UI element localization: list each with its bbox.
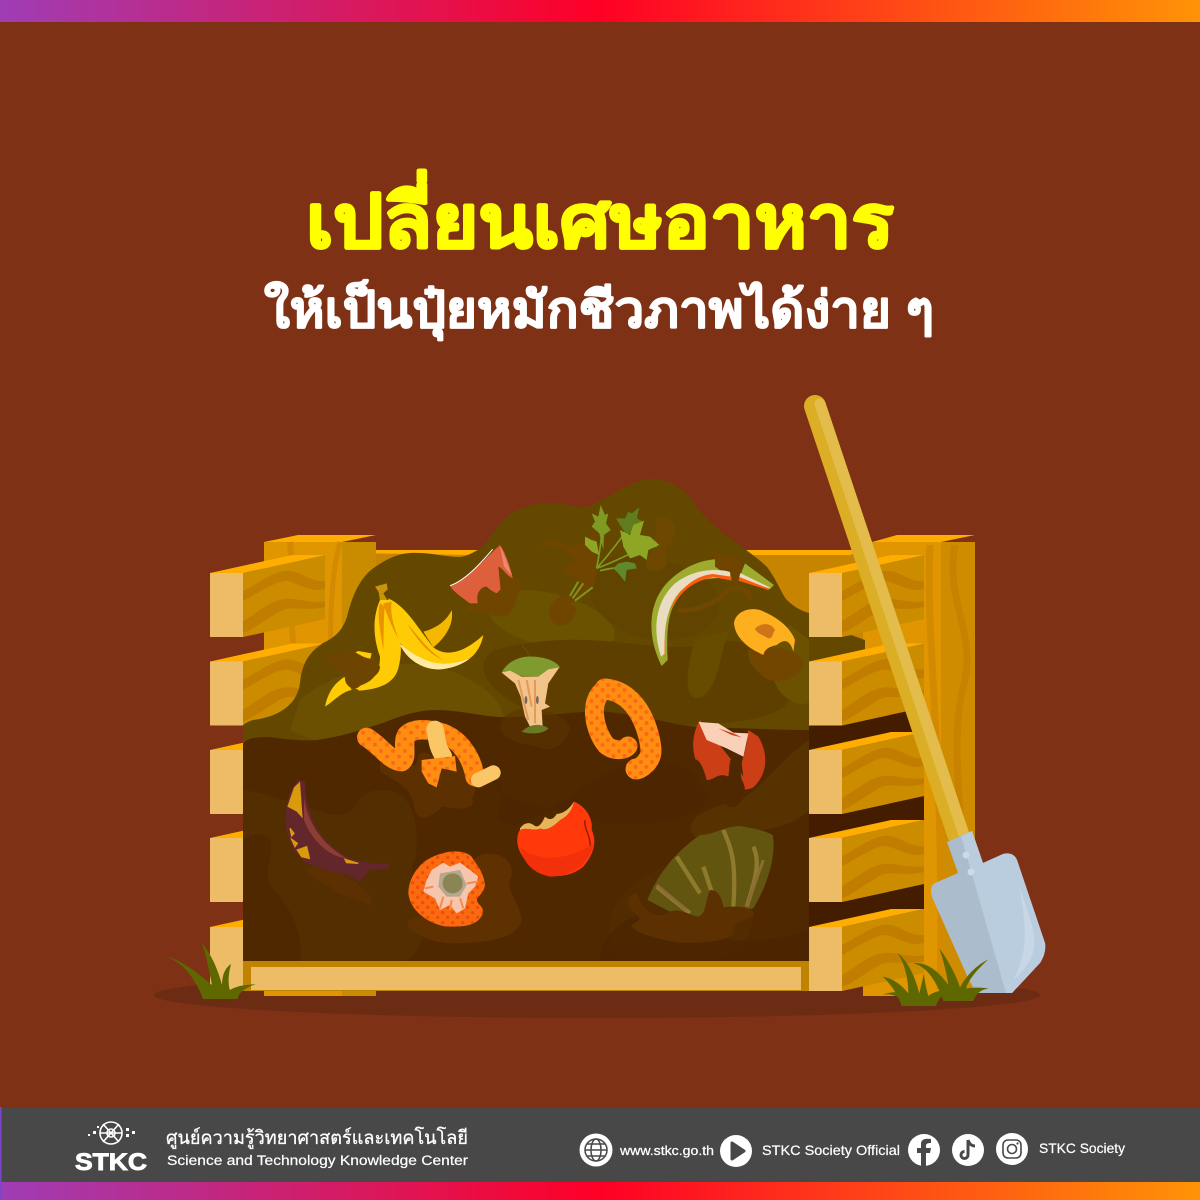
food: half-eaten mandarin xyxy=(408,851,522,943)
left planks xyxy=(210,555,325,991)
food: rotten cabbage xyxy=(628,826,774,943)
icon: instagram xyxy=(996,1133,1028,1165)
food: carrot tops xyxy=(533,505,675,625)
bin bottom frame xyxy=(243,961,809,991)
icon: globe xyxy=(580,1134,612,1166)
food: orange peel ring xyxy=(594,689,651,769)
logo wordmark: STKC xyxy=(75,1149,147,1176)
pile mid blobs xyxy=(290,664,503,754)
icon: facebook xyxy=(908,1134,940,1166)
food: bitten tomato xyxy=(517,802,594,877)
right back post xyxy=(863,535,975,996)
gap behind right planks xyxy=(809,620,924,965)
food: red fruit peel xyxy=(693,720,765,807)
pile outer layer xyxy=(243,479,809,961)
shovel blade xyxy=(931,831,1045,993)
instagram text: STKC Society xyxy=(1039,1140,1125,1156)
website text: www.stkc.go.th xyxy=(619,1143,714,1158)
logo emblem xyxy=(88,1122,135,1144)
grass left xyxy=(161,942,256,999)
ground shadow xyxy=(154,972,1040,1018)
food: orange fruit skin xyxy=(734,609,803,681)
icon: play xyxy=(720,1135,752,1167)
food: banana peel xyxy=(325,583,483,707)
shovel xyxy=(815,404,1045,993)
footer left edge xyxy=(0,1107,2,1200)
right planks xyxy=(809,555,924,991)
pile lower dark layer xyxy=(243,710,809,961)
food: red peel xyxy=(450,545,522,617)
top gradient bar xyxy=(0,0,1200,22)
title: เปลี่ยนเศษอาหาร xyxy=(306,169,894,263)
icon: tiktok xyxy=(952,1134,984,1166)
bin back wall xyxy=(353,550,870,650)
food: apple core xyxy=(500,646,570,749)
shovel handle xyxy=(815,404,963,834)
subtitle: ให้เป็นปุ๋ยหมักชีวภาพได้ง่าย ๆ xyxy=(264,279,934,341)
left back post xyxy=(264,535,376,996)
food: watermelon rind xyxy=(651,551,774,666)
bottom gradient bar xyxy=(0,1182,1200,1200)
compost bin illustration xyxy=(210,479,975,996)
organisation name English: Science and Technology Knowledge Center xyxy=(167,1153,469,1168)
food: orange peel pieces xyxy=(367,729,493,817)
STKC logo xyxy=(75,1122,147,1176)
organisation name Thai: ศูนย์ความรู้วิทยาศาสตร์และเทคโนโลยี xyxy=(166,1126,468,1149)
youtube text: STKC Society Official xyxy=(762,1142,900,1158)
food: rotten banana xyxy=(286,779,390,905)
compost pile xyxy=(243,479,809,961)
grass right xyxy=(883,948,988,1006)
footer bar xyxy=(0,1107,1200,1182)
pile lower blobs xyxy=(243,790,421,961)
